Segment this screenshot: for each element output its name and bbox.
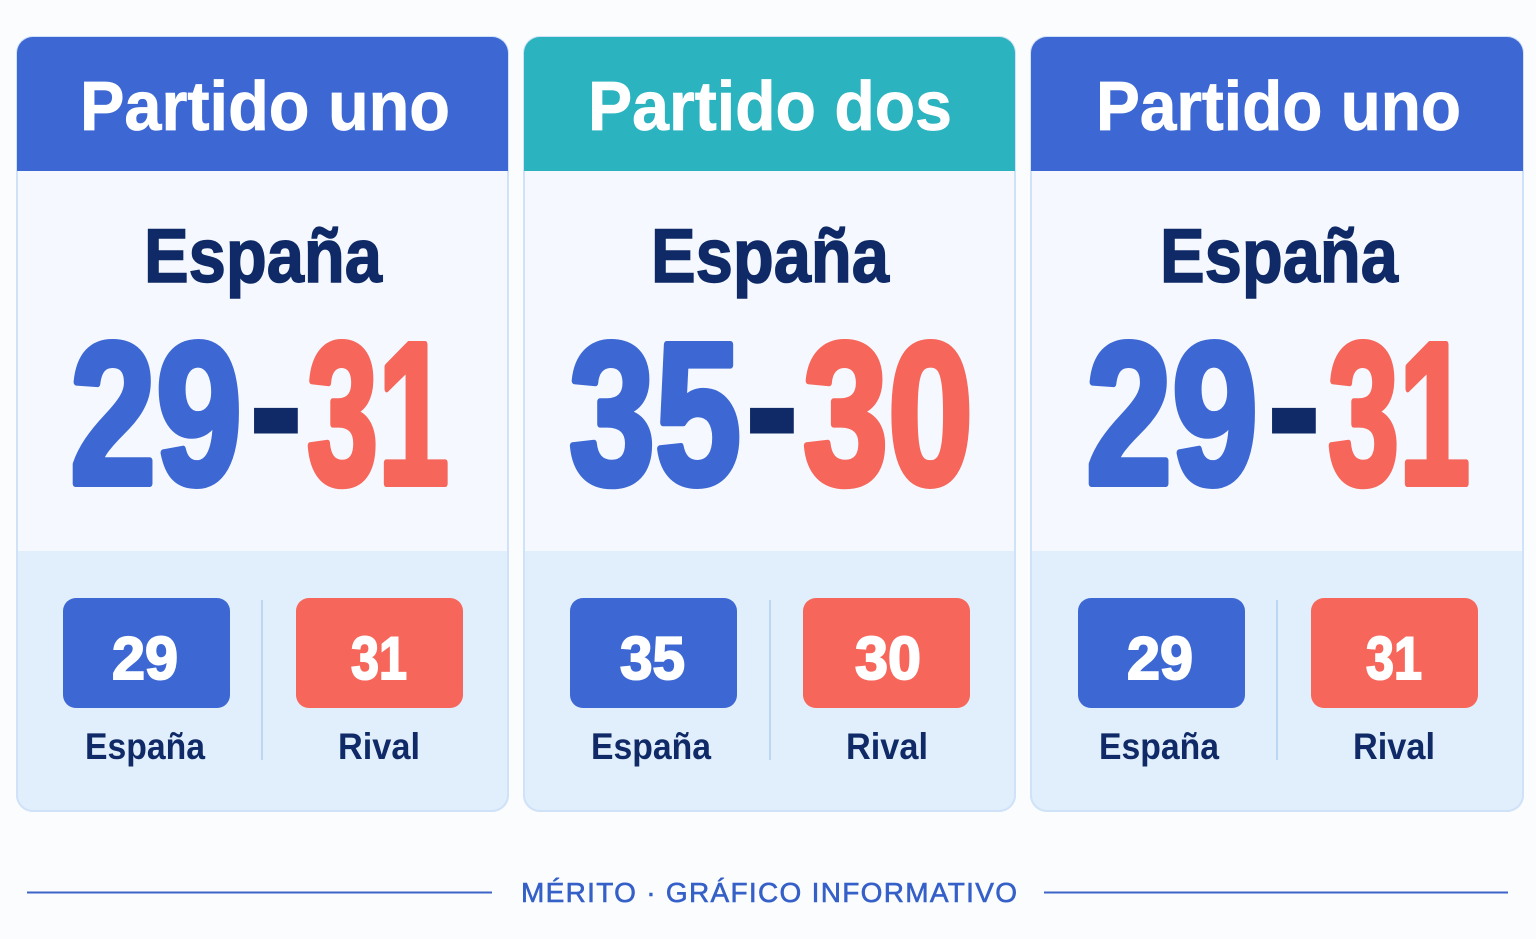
score: 35-30: 35: [569, 300, 741, 526]
footer caption: MÉRITO · GRÁFICO INFORMATIVO: [521, 877, 1017, 908]
panel: match card one: [17, 37, 508, 811]
badge: España 29: 29: [1127, 625, 1193, 692]
label: España: España: [591, 726, 711, 767]
label: Rival: Rival: [846, 726, 928, 767]
score: 29-31: 31: [307, 300, 449, 526]
score: 29-31: -: [249, 299, 303, 511]
panel: match card two: [524, 37, 1015, 811]
panel: match card three: [1031, 37, 1523, 811]
label: Rival: Rival: [1353, 726, 1435, 767]
badge: Rival 31: 31: [1366, 625, 1422, 692]
badge: Rival 31: [296, 598, 463, 708]
score: 35-30: [569, 299, 973, 526]
label: España: España: [85, 726, 205, 767]
team name: España: [1160, 214, 1399, 299]
heading: Partido uno: Partido uno: [80, 67, 450, 145]
badge: Rival 31: [1311, 598, 1478, 708]
label: Rival: Rival: [338, 726, 420, 767]
score: 35-30: 30: [803, 300, 973, 526]
score: 29-31: -: [1267, 299, 1321, 511]
score: 29-31: 29: [70, 300, 242, 526]
badge: España 29: [63, 598, 230, 708]
badge: Rival 30: 30: [855, 625, 921, 692]
badge: Rival 30: [803, 598, 970, 708]
badge: España 29: [1078, 598, 1245, 708]
team name: España: [144, 214, 383, 299]
heading: Partido dos: Partido dos: [588, 67, 952, 145]
score: 35-30: -: [745, 299, 799, 511]
badge: España 29: 29: [112, 625, 178, 692]
label: España: España: [1099, 726, 1219, 767]
score: 29-31: 29: [1086, 300, 1258, 526]
badge: España 35: [570, 598, 737, 708]
heading: Partido uno: Partido uno: [1096, 67, 1461, 145]
badge: España 35: 35: [620, 625, 685, 692]
team name: España: [651, 214, 890, 299]
score: 29-31: [70, 299, 449, 526]
badge: Rival 31: 31: [351, 625, 407, 692]
score: 29-31: [1086, 299, 1470, 526]
